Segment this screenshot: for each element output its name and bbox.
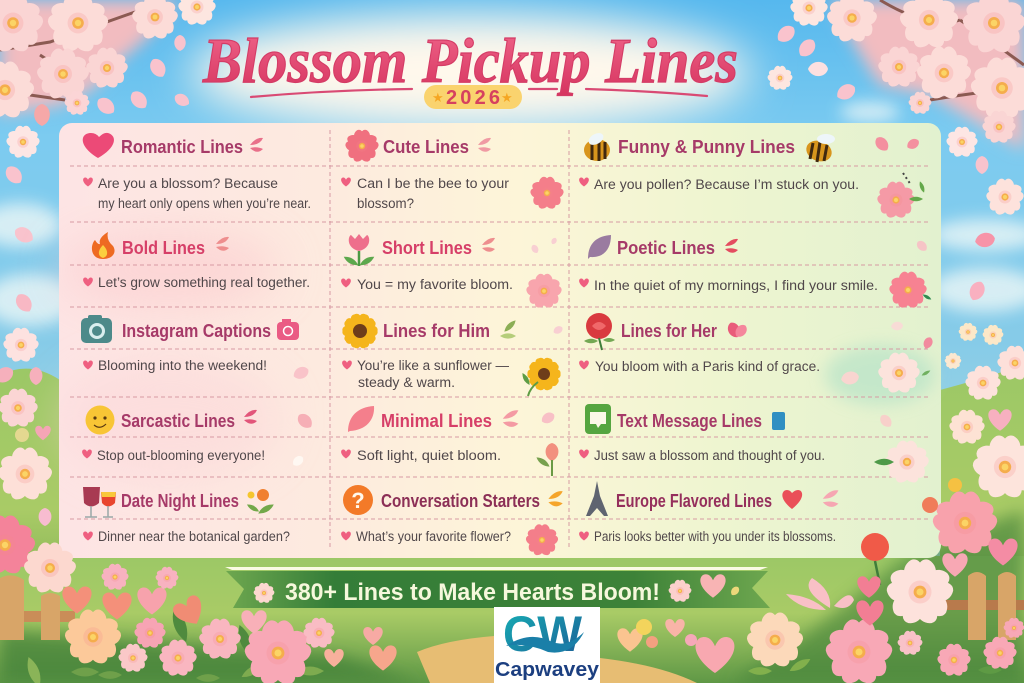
fence left [0, 575, 75, 640]
cell: Funny and Punny Lines: Are you pollen? Because I’m stuck on you. [594, 177, 859, 192]
cell: Romantic Lines: Romantic Lines [121, 137, 243, 157]
cell: Romantic Lines: my heart only opens when you’re near. [98, 196, 311, 211]
year badge: 2026 [446, 87, 500, 109]
bottom banner [225, 567, 770, 608]
left side flowers [0, 291, 78, 596]
year badge [424, 85, 522, 109]
cell: Romantic Lines [83, 133, 311, 211]
cell: Short Lines [341, 234, 563, 310]
clouds [0, 102, 1024, 326]
cell: Cute Lines: Cute Lines [383, 137, 469, 157]
cell: Europe Flavored Lines [579, 481, 838, 544]
cell: Sarcastic Lines [82, 406, 315, 468]
cell: Cute Lines: Can I be the bee to your [357, 176, 510, 191]
cell: Conversation Starters: What’s your favorite flower? [356, 529, 511, 544]
cell: Cute Lines: blossom? [357, 196, 414, 211]
cell: Romantic Lines: Are you a blossom? Because [98, 176, 278, 191]
cell: Cute Lines [341, 130, 565, 211]
dark foliage right [730, 510, 1024, 683]
cell: Funny and Punny Lines: Funny & Punny Lines [618, 137, 795, 157]
cell: Funny and Punny Lines [579, 131, 926, 220]
bottom meadow [0, 556, 1024, 683]
logo: Capwavey: CW [503, 606, 583, 662]
right meadow background [940, 365, 1024, 683]
garden flowers right [617, 497, 1024, 683]
cell: Europe Flavored Lines: Europe Flavored Lines [616, 491, 772, 511]
logo: Capwavey [494, 606, 600, 683]
cell: Lines for Him [333, 306, 568, 399]
cell: Bold Lines [83, 232, 310, 290]
cell: Date Night Lines: Date Night Lines [121, 491, 239, 511]
cell: Minimal Lines [341, 406, 558, 476]
cell: Lines for Her: Lines for Her [621, 321, 717, 341]
cell: Short Lines: Short Lines [382, 238, 472, 258]
cell: Text Message Lines: Text Message Lines [617, 411, 762, 431]
cell: Lines for Him: You’re like a sunflower — [357, 358, 509, 373]
cell: Conversation Starters: Conversation Starters [381, 491, 540, 511]
cell: Minimal Lines: Minimal Lines [381, 411, 492, 431]
year badge: ★ [432, 90, 444, 105]
garden path [417, 636, 697, 683]
cell: Instagram Captions [81, 315, 311, 382]
cell: Poetic Lines [579, 235, 932, 310]
cell: Conversation Starters: ? [351, 488, 365, 513]
cell: Lines for Her [579, 313, 934, 395]
cell: Instagram Captions: Blooming into the weekend! [98, 358, 267, 373]
left meadow background [0, 369, 60, 683]
cell: Date Night Lines: Dinner near the botanical garden? [98, 529, 290, 544]
fence right [940, 572, 1024, 640]
cell: Instagram Captions: Instagram Captions [122, 321, 271, 341]
cell: Poetic Lines: In the quiet of my mornings, I find your smile. [594, 278, 878, 293]
title: Blossom Pickup Lines [202, 25, 738, 96]
cell: Poetic Lines: Poetic Lines [617, 238, 715, 258]
cell: Text Message Lines: Just saw a blossom and thought of you. [594, 448, 825, 463]
cell: Sarcastic Lines: Stop out-blooming everyone! [97, 448, 265, 463]
garden flowers left [24, 564, 397, 683]
falling petals right [774, 22, 996, 303]
logo: Capwavey: Capwavey [495, 659, 600, 681]
cell: Minimal Lines: Soft light, quiet bloom. [357, 448, 501, 463]
cell: Bold Lines: Bold Lines [122, 238, 205, 258]
cell: Conversation Starters [341, 485, 563, 557]
cell: Text Message Lines [579, 404, 931, 485]
title glow [190, 14, 750, 130]
cherry branch top left [0, 0, 217, 160]
cell: Sarcastic Lines: Sarcastic Lines [121, 411, 235, 431]
bottom banner: 380+ Lines to Make Hearts Bloom! [285, 579, 660, 606]
dark foliage left [0, 630, 420, 683]
right side flowers [930, 323, 1024, 577]
cell: Lines for Him: steady & warm. [358, 375, 455, 390]
cell: Lines for Him: Lines for Him [383, 321, 490, 341]
falling petals left [2, 35, 192, 246]
year badge: ★ [501, 90, 513, 105]
cell: Date Night Lines [83, 487, 290, 544]
cell: Lines for Her: You bloom with a Paris kind of grace. [595, 359, 820, 374]
title underline [251, 89, 707, 97]
cell: Bold Lines: Let’s grow something real together. [98, 275, 310, 290]
cell: Short Lines: You = my favorite bloom. [357, 277, 513, 292]
main panel [59, 123, 941, 558]
cell: Europe Flavored Lines: Paris looks better with you under its blossoms. [594, 529, 836, 544]
cherry branch top right [767, 0, 1024, 217]
